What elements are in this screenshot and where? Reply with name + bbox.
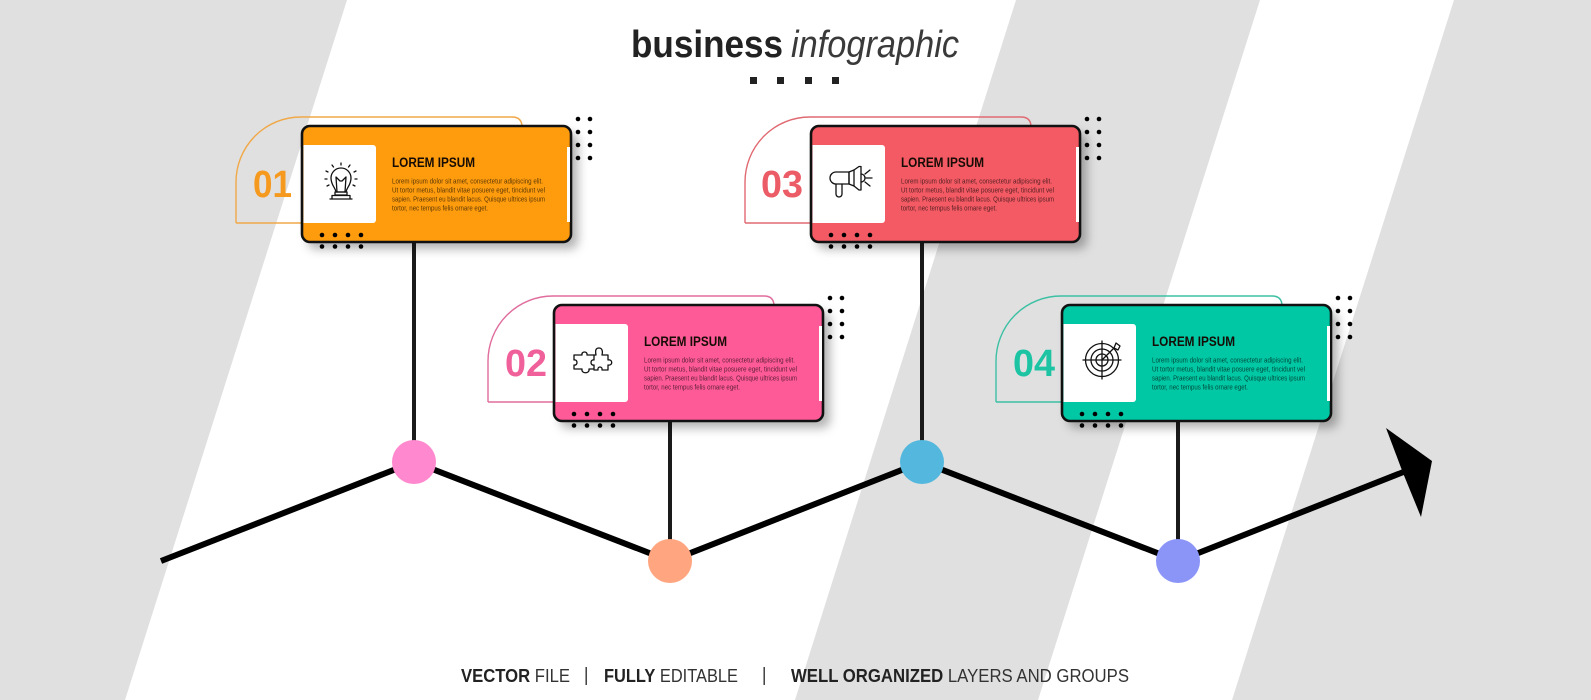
footer text: VECTOR FILE — [461, 666, 570, 686]
panel: step 02: LOREM IPSUM — [644, 334, 727, 349]
connector stem 3 — [920, 240, 924, 445]
panel: step 03: 03 — [761, 164, 803, 206]
panel: step 02 — [488, 296, 844, 428]
step 03 body text: sapien. Praesent eu blandit lacus. Quisque ultrices ipsum — [901, 194, 1054, 204]
node 1 — [392, 440, 436, 484]
step 04 body text: tortor, nec tempus felis ornare eget. — [1152, 382, 1248, 392]
footer text: FULLY EDITABLE — [604, 666, 738, 686]
panel: step 01 — [236, 117, 592, 249]
icon: target — [1083, 341, 1121, 379]
step 02 body text: Lorem ipsum dolor sit amet, consectetur adipiscing elit. — [644, 356, 795, 364]
step 03 body text: Lorem ipsum dolor sit amet, consectetur adipiscing elit. — [901, 176, 1052, 186]
panel: step 03 — [745, 117, 1101, 249]
step 01 body text: sapien. Praesent eu blandit lacus. Quisque ultrices ipsum — [392, 194, 545, 204]
step 04 body text: Ut tortor metus, blandit vitae posuere eget, tincidunt vel — [1152, 364, 1305, 374]
connector stem 4 — [1176, 419, 1180, 544]
step 03 body text: tortor, nec tempus felis ornare eget. — [901, 204, 997, 212]
icon: puzzle — [574, 348, 612, 373]
panel: step 02: 02 — [505, 343, 547, 385]
step 01 body text: Ut tortor metus, blandit vitae posuere eget, tincidunt vel — [392, 186, 545, 194]
step 02 body text: sapien. Praesent eu blandit lacus. Quisque ultrices ipsum — [644, 374, 797, 382]
panel: step 04: 04 — [1013, 343, 1055, 385]
step 04 body text: sapien. Praesent eu blandit lacus. Quisque ultrices ipsum — [1152, 374, 1305, 382]
step 01 body text: Lorem ipsum dolor sit amet, consectetur adipiscing elit. — [392, 176, 543, 186]
title: business — [631, 24, 783, 66]
timeline arrow line — [161, 428, 1432, 561]
node 4 — [1156, 539, 1200, 583]
step 01 body text: tortor, nec tempus felis ornare eget. — [392, 204, 488, 212]
step 04 body text: Lorem ipsum dolor sit amet, consectetur adipiscing elit. — [1152, 356, 1303, 364]
title — [631, 24, 959, 66]
step 01 body text — [392, 176, 545, 212]
step 04 body text — [1152, 356, 1305, 392]
connector stem 1 — [412, 240, 416, 445]
connector stem 2 — [668, 419, 672, 544]
footer text: WELL ORGANIZED LAYERS AND GROUPS — [791, 666, 1129, 686]
footer text — [461, 666, 1129, 686]
step 02 body text: tortor, nec tempus felis ornare eget. — [644, 382, 740, 392]
panel: step 01: 01 — [253, 164, 292, 206]
title: infographic — [791, 24, 959, 66]
step 02 body text — [644, 356, 797, 392]
panel: step 01: LOREM IPSUM — [392, 155, 475, 170]
panel: step 04 — [996, 296, 1352, 428]
step 03 body text — [901, 176, 1054, 212]
icon: megaphone — [830, 166, 872, 197]
icon: light bulb — [325, 163, 357, 199]
step 02 body text: Ut tortor metus, blandit vitae posuere eget, tincidunt vel — [644, 364, 797, 374]
title dots — [750, 77, 839, 84]
node 3 — [900, 440, 944, 484]
panel: step 04: LOREM IPSUM — [1152, 334, 1235, 349]
panel: step 03: LOREM IPSUM — [901, 155, 984, 170]
step 03 body text: Ut tortor metus, blandit vitae posuere eget, tincidunt vel — [901, 186, 1054, 194]
node 2 — [648, 539, 692, 583]
